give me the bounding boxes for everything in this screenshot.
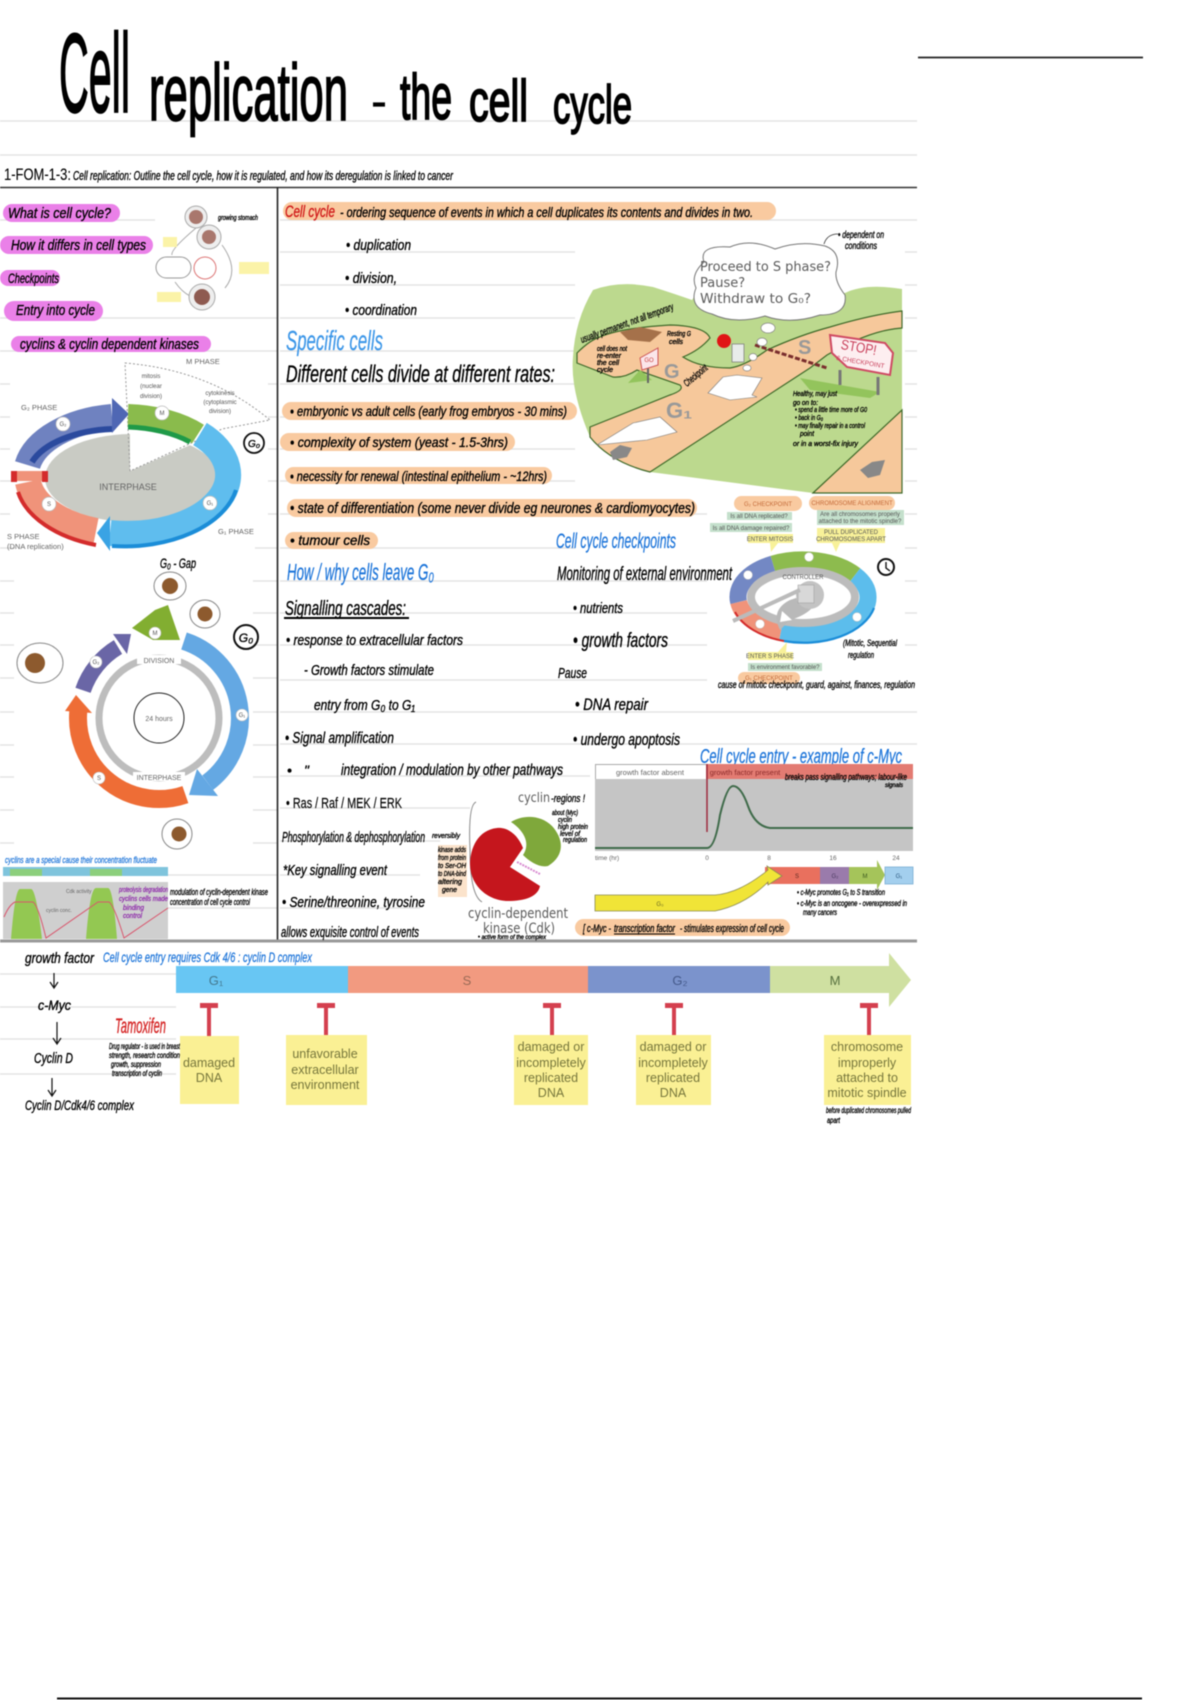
phase markers xyxy=(90,627,248,784)
panel: cyclin D pathway xyxy=(25,949,313,1113)
panel: why cells leave G0: reversibly xyxy=(432,833,460,840)
road labels: G xyxy=(664,361,680,383)
title: the xyxy=(400,61,452,133)
ring segments xyxy=(738,560,868,634)
thought cloud xyxy=(694,243,845,320)
hill annotations: • may finally repair in a control xyxy=(795,421,865,430)
inhibition markers xyxy=(200,1003,878,1036)
cyclin and Cdk complex: -regions ! xyxy=(551,793,585,805)
phase labels xyxy=(7,357,254,551)
mini chart: cyclin concentration: concentration of cell cycle control xyxy=(170,897,251,907)
G0 yellow arrow xyxy=(595,866,782,911)
shadows xyxy=(628,370,880,398)
panel: cyclin D pathway: growth factor xyxy=(25,950,95,967)
G2 arrow xyxy=(83,634,131,690)
hill annotations xyxy=(579,302,868,448)
hill annotations: usually permanent, not all temporary xyxy=(579,302,676,346)
labels above: PULL DUPLICATED xyxy=(824,530,879,536)
callout: unfavorable environment: unfavorable xyxy=(292,1047,358,1061)
panel: c-Myc chart: breaks pass signalling pathways; labour-like xyxy=(785,772,907,782)
topic: entry into cycle: Entry into cycle xyxy=(16,302,95,319)
hill annotations: point xyxy=(799,429,815,438)
panel: why cells leave G0: allows exquisite control of events xyxy=(281,924,419,941)
learning objective header: 1-FOM-1-3: xyxy=(4,165,71,184)
learning objective header: Cell replication: Outline the cell cycle, how it is regulated, and how its deregulation is linked to cancer xyxy=(73,168,453,183)
c-Myc notes: many cancers xyxy=(803,908,837,917)
panel: specific cells: Specific cells xyxy=(286,325,383,356)
car xyxy=(597,417,677,445)
callout: G2 DNA: replicated xyxy=(646,1071,700,1085)
cloud note xyxy=(824,230,884,252)
callout: S phase DNA xyxy=(514,1035,588,1105)
heading: signalling cascades: Signalling cascades: xyxy=(285,598,406,620)
panel: cell cycle definition: • duplication xyxy=(346,237,411,254)
chart axis: 8 xyxy=(767,855,771,862)
hill annotations: the cell xyxy=(597,360,619,367)
thought cloud: Withdraw to G₀? xyxy=(700,292,811,307)
hill annotations: cell does not xyxy=(597,346,628,353)
phase labels: division) xyxy=(209,409,231,415)
callout: mitotic spindle: improperly xyxy=(838,1056,897,1070)
phase labels: M PHASE xyxy=(186,357,220,366)
hill annotations: cycle xyxy=(597,367,613,374)
top right rule xyxy=(918,56,1143,58)
cloud note: conditions xyxy=(845,241,877,252)
M arc xyxy=(128,415,198,442)
labels above: attached to the mitotic spindle? xyxy=(819,519,902,525)
callout: damaged DNA: damaged xyxy=(183,1056,235,1070)
callout: S phase DNA: replicated xyxy=(524,1071,578,1085)
callout: unfavorable environment xyxy=(286,1035,367,1105)
phase markers: S xyxy=(97,776,101,782)
phase bar xyxy=(765,860,913,890)
cyclin and Cdk complex xyxy=(438,791,588,941)
panel: why cells leave G0: • response to extracellular factors xyxy=(286,632,463,649)
hills xyxy=(573,284,902,493)
icon: go sign: GO xyxy=(644,358,654,364)
spindle note xyxy=(826,1106,911,1125)
Cdk protein xyxy=(470,828,540,901)
panel: cell cycle definition: - ordering sequence of events in which a cell duplicates its contents and divides in two. xyxy=(340,204,753,220)
panel: why cells leave G0 xyxy=(281,559,563,941)
panel: why cells leave G0: • xyxy=(287,762,292,778)
topic: cyclins and kinases: cyclins & cyclin dependent kinases xyxy=(20,336,199,353)
icon: G0 badge xyxy=(234,625,258,649)
hill annotations: re-enter xyxy=(597,353,622,360)
panel: cell cycle checkpoints: • growth factors xyxy=(573,630,668,652)
G1 arc xyxy=(97,434,236,551)
phase labels: cytokinesis xyxy=(205,391,235,397)
labels above xyxy=(710,496,904,552)
panel: cell cycle definition: • division, xyxy=(345,270,397,287)
icon: G0 badge xyxy=(244,433,264,453)
panel: why cells leave G0: " xyxy=(304,762,310,778)
panel: c-Myc chart: signals xyxy=(885,783,903,789)
icon: stop sign: & CHECKPOINT xyxy=(836,355,885,370)
mini chart: cyclin concentration xyxy=(3,855,268,939)
phase bar: G₂ xyxy=(832,874,839,880)
hill annotations: • back in G₀ xyxy=(795,413,823,422)
division and interphase ring: INTERPHASE xyxy=(137,775,182,782)
title: replication xyxy=(149,48,348,137)
chart axis: time (hr) xyxy=(595,855,619,862)
rate point: complexity: • complexity of system (yeast - 1.5-3hrs) xyxy=(290,434,508,450)
panel: specific cells xyxy=(280,325,697,549)
panel: cell cycle definition xyxy=(283,202,776,319)
title: - xyxy=(371,73,387,129)
icon: G0 badge: G₀ xyxy=(248,439,260,450)
S arrow xyxy=(65,695,185,799)
M wedge xyxy=(132,605,180,640)
small cell division diagram: growing stomach xyxy=(218,215,258,222)
panel: cyclin D pathway: Cyclin D xyxy=(34,1050,73,1067)
phase labels: S PHASE xyxy=(7,532,40,541)
labels below: G₁ CHECKPOINT xyxy=(745,676,793,682)
timeline: phase arrow: G₂ xyxy=(672,973,688,988)
callout: S phase DNA: DNA xyxy=(538,1086,565,1100)
G0 yellow arrow: G₀ xyxy=(656,902,664,908)
annotations: regulation xyxy=(848,650,874,660)
panel: specific cells: Different cells divide at different rates: xyxy=(286,361,555,388)
panel: c-Myc chart: Cell cycle entry - example of c-Myc xyxy=(700,746,902,768)
panel: cell cycle checkpoints: • DNA repair xyxy=(575,695,649,714)
labels below: Is environment favorable? xyxy=(750,665,820,671)
phase labels: (nuclear xyxy=(140,384,162,390)
road xyxy=(577,311,902,472)
cell cycle circle diagram with G0 cells xyxy=(17,555,258,849)
gate and barrier xyxy=(717,334,827,368)
title xyxy=(59,11,632,137)
labels above: CHROMOSOME ALIGNMENT xyxy=(811,501,893,507)
heading: signalling cascades xyxy=(284,598,409,620)
callout: mitotic spindle: chromosome xyxy=(831,1040,903,1054)
phase bar: S xyxy=(795,874,799,880)
division and interphase ring xyxy=(99,655,219,782)
note: peach block: gene xyxy=(442,885,457,894)
note: cyclin: cyclin xyxy=(558,817,572,824)
note: tamoxifen: Drug regulator - is used in breast xyxy=(109,1042,180,1051)
callout: unfavorable environment: environment xyxy=(291,1078,360,1092)
mini chart: cyclin concentration: control xyxy=(123,913,142,920)
callout: S phase DNA: incompletely xyxy=(516,1056,586,1070)
learning objective header xyxy=(4,165,453,184)
panel: why cells leave G0: entry from G₀ to G₁ xyxy=(314,697,415,714)
cloud note: • dependent on xyxy=(838,230,884,241)
hill annotations: Healthy, may just xyxy=(793,389,838,398)
c-Myc notes: • c-Myc promotes G₁ to S transition xyxy=(797,888,885,897)
mini chart: cyclin concentration: binding xyxy=(123,905,144,912)
phase strip xyxy=(3,867,168,876)
G0 gap note: G₀ - Gap xyxy=(160,555,196,571)
callout: S phase DNA: damaged or xyxy=(518,1040,584,1054)
phase labels: G₂ PHASE xyxy=(21,403,57,412)
cyclin and Cdk complex: • active form of the complex xyxy=(478,935,547,941)
icon: stop sign: STOP! xyxy=(840,336,878,358)
hill annotations: Resting G xyxy=(667,331,691,338)
mini chart: cyclin concentration: modulation of cyclin-dependent kinase xyxy=(170,887,268,897)
phase bar: M xyxy=(862,874,868,880)
phase markers: G₂ xyxy=(92,660,100,666)
note: cyclin xyxy=(552,810,588,844)
title: cycle xyxy=(553,75,632,135)
note: cyclin: about (Myc) xyxy=(552,810,578,817)
cyclin and Cdk complex: kinase (Cdk) xyxy=(483,921,555,937)
spindle note: before duplicated chromosomes pulled xyxy=(826,1106,911,1115)
panel: why cells leave G0: • Ras / Raf / MEK / ERK xyxy=(286,795,402,812)
hill annotations: • spend a little time more of G0 xyxy=(795,405,868,414)
mini chart: cyclin concentration: cyclins cells made xyxy=(119,896,168,903)
phase markers: S xyxy=(47,502,51,508)
thought bubbles xyxy=(743,323,775,371)
hill annotations: or in a worst-fix injury xyxy=(793,439,859,448)
c-Myc definition xyxy=(575,919,790,936)
title: Cell xyxy=(59,11,130,136)
road labels xyxy=(664,337,811,423)
phase markers: G₁ xyxy=(207,501,213,507)
panel: c-Myc chart xyxy=(575,746,913,936)
arrow: c-Myc to cyclin D xyxy=(53,1022,61,1044)
panel: cell cycle definition: • coordination xyxy=(345,302,417,319)
S arc xyxy=(11,471,96,545)
panel: cell cycle checkpoints: Pause xyxy=(558,665,587,682)
note: tamoxifen: growth, suppression xyxy=(111,1060,161,1069)
note: peach block: to DNA-bind xyxy=(438,869,467,878)
phase markers: M xyxy=(152,631,158,637)
road corner xyxy=(813,410,902,493)
illustration: checkpoint road scene xyxy=(573,230,902,493)
chart axis: 16 xyxy=(829,855,837,862)
topic: checkpoints xyxy=(0,270,60,286)
panel: cell cycle checkpoints: • undergo apoptosis xyxy=(573,730,680,749)
controller: CONTROLLER xyxy=(782,575,824,581)
timeline: phase arrow xyxy=(176,953,911,1007)
note: cyclin: high protein xyxy=(558,824,588,831)
ring phase markers xyxy=(744,552,862,628)
panel: why cells leave G0: - Growth factors stimulate xyxy=(304,662,434,679)
cell cycle ring diagram with G0: INTERPHASE xyxy=(99,482,157,492)
panel: cell cycle checkpoints xyxy=(556,530,732,749)
arrow: growth factor to c-Myc xyxy=(50,973,58,988)
hill annotations: go on to: xyxy=(793,398,818,407)
phase labels: division) xyxy=(140,394,162,400)
labels above: Is all DNA damage repaired? xyxy=(713,526,790,532)
icon: stop sign xyxy=(830,335,893,395)
panel: why cells leave G0: • Serine/threonine, tyrosine xyxy=(282,894,425,911)
phase labels: G₁ PHASE xyxy=(218,527,254,536)
panel: cell cycle checkpoints: Cell cycle checkpoints xyxy=(556,530,676,553)
labels above: Is all DNA replicated? xyxy=(730,514,788,520)
topic: what is cell cycle: What is cell cycle? xyxy=(8,205,112,222)
c-Myc definition: [ c-Myc - xyxy=(582,923,611,935)
timeline: phase arrow: G₁ xyxy=(209,973,224,988)
annotations xyxy=(718,638,915,691)
labels above: ENTER MITOSIS xyxy=(747,537,793,543)
phase markers: G₁ xyxy=(239,713,245,719)
spindle note: apart xyxy=(827,1116,841,1125)
cyclin and Cdk complex: cyclin xyxy=(518,791,550,806)
phase markers: M xyxy=(160,411,164,417)
note: peach block xyxy=(438,845,467,897)
mini chart: cyclin concentration: proteolysis degradation xyxy=(118,887,168,894)
G2 arc xyxy=(28,398,129,465)
callout: G2 DNA xyxy=(636,1035,711,1105)
hut xyxy=(620,327,662,342)
note: tamoxifen xyxy=(109,1015,180,1078)
rate point: tumour: • tumour cells xyxy=(290,532,370,548)
note: cyclin: regulation xyxy=(563,837,587,844)
cells xyxy=(17,572,220,849)
c-Myc definition: - stimulates expression of cell cycle xyxy=(680,923,784,935)
note: tamoxifen: Tamoxifen xyxy=(115,1015,166,1038)
road labels: G₁ xyxy=(666,398,692,423)
annotations: (Mitotic, Sequential xyxy=(843,638,898,648)
phase bar: G₁ xyxy=(896,874,902,880)
timeline: phase arrow: M xyxy=(830,973,840,988)
controller xyxy=(733,571,855,630)
callout: G2 DNA: damaged or xyxy=(640,1040,706,1054)
callout: G2 DNA: DNA xyxy=(660,1086,687,1100)
splat xyxy=(708,375,762,400)
phase markers xyxy=(42,406,217,511)
callout: unfavorable environment: extracellular xyxy=(291,1063,359,1077)
panel: why cells leave G0: • Signal amplification xyxy=(285,730,394,747)
division and interphase ring: DIVISION xyxy=(144,658,174,665)
chart axis xyxy=(595,855,900,862)
panel: cell cycle checkpoints: Monitoring of external environment xyxy=(557,564,732,585)
clock centre xyxy=(134,693,184,743)
c-Myc notes xyxy=(797,888,907,917)
panel: why cells leave G0: How / why cells leave G₀ xyxy=(287,559,434,585)
panel: cyclin D pathway: Cyclin D/Cdk4/6 complex xyxy=(25,1097,135,1113)
cell cycle ring diagram with G0 xyxy=(7,357,270,551)
G1 arrow xyxy=(184,641,240,796)
labels above: CHROMOSOMES APART xyxy=(816,537,886,543)
callout: mitotic spindle xyxy=(824,1035,911,1105)
icon: arrows xyxy=(610,445,632,460)
chart axis: 24 xyxy=(892,855,900,862)
panel: cell cycle definition: Cell cycle xyxy=(285,202,335,221)
hill annotations: cells xyxy=(669,339,683,346)
mini chart: cyclin concentration: cyclins are a special cause their concentration fluctuate xyxy=(5,855,157,865)
phase labels: mitosis xyxy=(142,374,160,380)
thought cloud: Proceed to S phase? xyxy=(700,260,831,275)
panel: why cells leave G0: integration / modulation by other pathways xyxy=(341,762,563,779)
phase labels: (DNA replication) xyxy=(7,542,64,551)
labels below: ENTER S PHASE xyxy=(746,654,794,660)
cyclin and Cdk complex: cyclin-dependent xyxy=(468,906,568,922)
panel: cyclin D pathway: c-Myc xyxy=(38,997,71,1013)
mini chart: cyclin concentration: Cdk activity xyxy=(66,889,92,895)
note: peach block: kinase adds xyxy=(438,845,466,854)
chart axis: 0 xyxy=(705,855,709,862)
icon: G0 badge: G₀ xyxy=(239,631,253,645)
labels below xyxy=(738,642,822,684)
checkpoint controller ring diagram xyxy=(710,496,915,691)
chart header: growth factor absent xyxy=(616,768,685,777)
callout: damaged DNA: DNA xyxy=(196,1071,223,1085)
arrow: cyclin D to complex xyxy=(48,1078,56,1096)
topic: entry into cycle xyxy=(4,301,103,321)
interphase centre xyxy=(45,434,219,522)
labels above: Are all chromosomes properly xyxy=(820,512,900,518)
rate point: embryonic: • embryonic vs adult cells (early frog embryos - 30 mins) xyxy=(290,403,567,419)
chart plot xyxy=(595,779,913,851)
chart header xyxy=(596,764,913,780)
mini chart: cyclin concentration: cyclin conc. xyxy=(46,908,72,914)
callout: mitotic spindle: attached to xyxy=(836,1071,898,1085)
callout: G2 DNA: incompletely xyxy=(638,1056,708,1070)
note: peach block: from protein xyxy=(438,853,466,862)
note: cyclin: level of xyxy=(560,831,581,838)
small cell division diagram xyxy=(156,206,269,310)
topic: checkpoints: Checkpoints xyxy=(8,270,59,286)
note: peach block: altering xyxy=(438,877,463,886)
road labels: S xyxy=(798,337,811,359)
bottom rule xyxy=(57,1698,1142,1700)
clock centre: 24 hours xyxy=(145,716,173,723)
icon: clock xyxy=(878,559,894,575)
rate point: renewal: • necessity for renewal (intestinal epithelium - ~12hrs) xyxy=(290,468,547,484)
hill annotations: Checkpoint xyxy=(682,362,711,389)
chart header: growth factor present xyxy=(710,768,781,777)
callout: damaged DNA xyxy=(180,1036,239,1104)
panel: why cells leave G0: *Key signalling event xyxy=(283,862,388,879)
rate point: differentiation: • state of differentiation (some never divide eg neurones & cardiomyocytes) xyxy=(290,501,695,517)
callout: mitotic spindle: mitotic spindle xyxy=(827,1086,907,1100)
panel: why cells leave G0: Phosphorylation & dephosphorylation xyxy=(282,829,425,846)
topic: differences in cell types: How it differs in cell types xyxy=(11,237,146,254)
panel: contents list xyxy=(0,204,211,353)
icon: go sign xyxy=(640,348,658,383)
annotations: cause of mitotic checkpoint, guard, against, finances, regulation xyxy=(718,680,915,691)
timeline: phase arrow: S xyxy=(463,973,472,988)
panel: cell cycle checkpoints: • nutrients xyxy=(573,600,623,617)
cyclin protein xyxy=(511,817,561,866)
panel: cyclin D pathway: Cell cycle entry requires Cdk 4/6 : cyclin D complex xyxy=(103,949,313,965)
note: peach block: to Ser-OH xyxy=(438,861,466,870)
c-Myc definition: transcription factor xyxy=(614,923,676,935)
phase labels: (cytoplasmic xyxy=(203,400,237,406)
note: tamoxifen: strength, research condition xyxy=(109,1051,180,1060)
c-Myc notes: • c-Myc is an oncogene - overexpressed in xyxy=(797,899,907,908)
phase markers: G₂ xyxy=(60,422,67,428)
note: tamoxifen: transcription of cyclin xyxy=(112,1069,162,1078)
thought cloud: Pause? xyxy=(700,276,745,291)
title: cell xyxy=(469,69,528,134)
labels above: G₂ CHECKPOINT xyxy=(744,502,792,508)
